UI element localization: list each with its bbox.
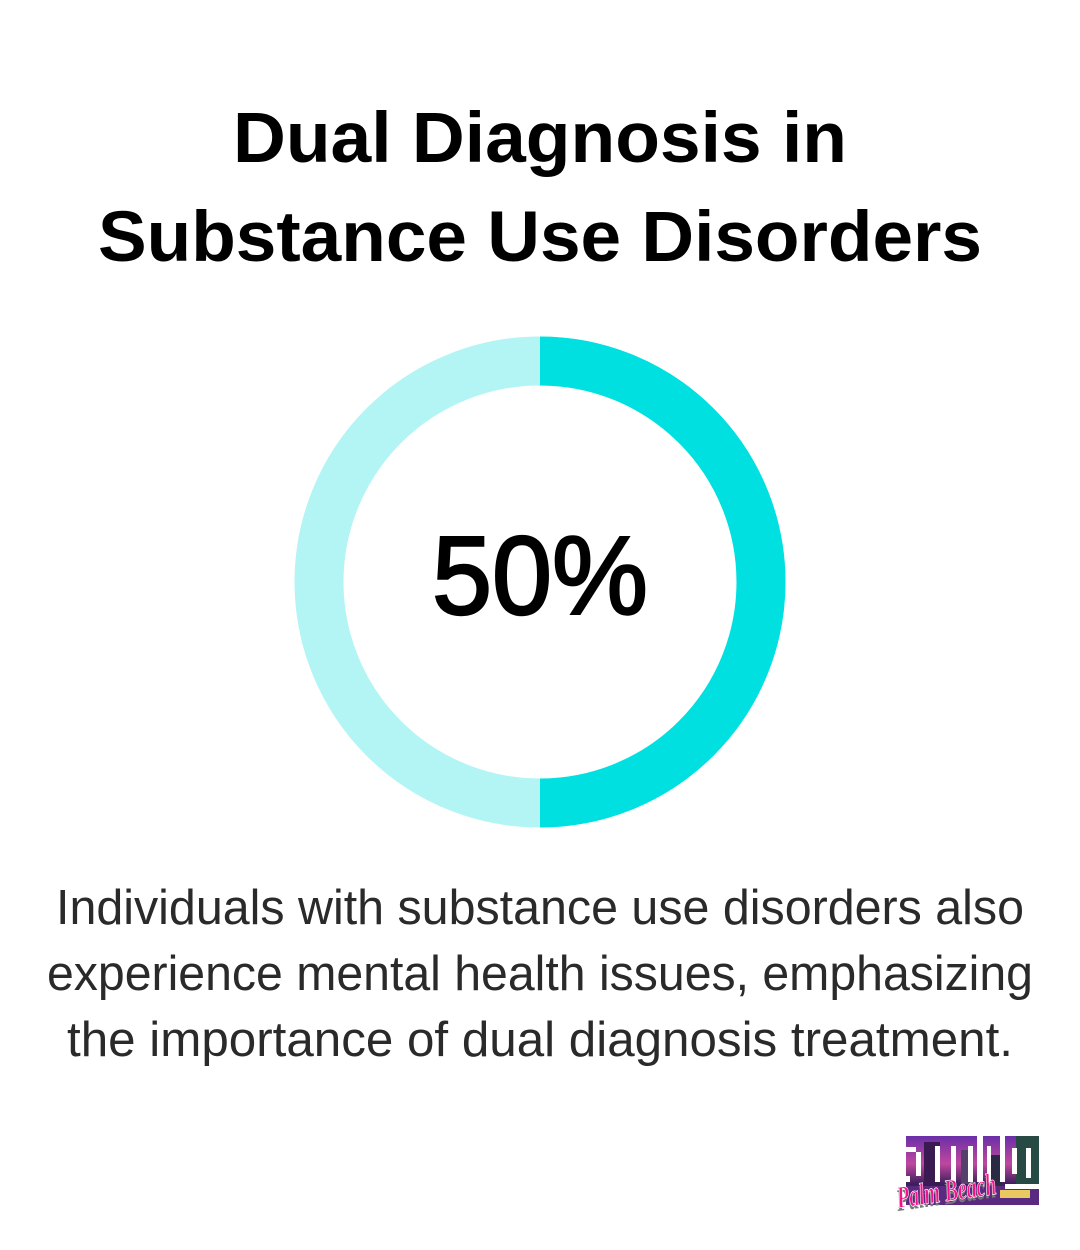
description text: experience mental health issues, emphasizing [47, 947, 1033, 1001]
title [98, 99, 982, 277]
donut value: 50% [432, 514, 648, 638]
logo script text [893, 1166, 998, 1218]
donut chart: 50% [319, 361, 761, 803]
logo script text: Palm Beach [894, 1166, 998, 1215]
description text [47, 881, 1033, 1067]
title: Substance Use Disorders [98, 198, 982, 277]
title: Dual Diagnosis in [233, 99, 847, 178]
description text: the importance of dual diagnosis treatment. [67, 1013, 1013, 1067]
logo: Amity Palm Beach [893, 1130, 1039, 1218]
logo script text: Palm Beach [893, 1169, 998, 1218]
description text: Individuals with substance use disorders also [56, 881, 1024, 935]
